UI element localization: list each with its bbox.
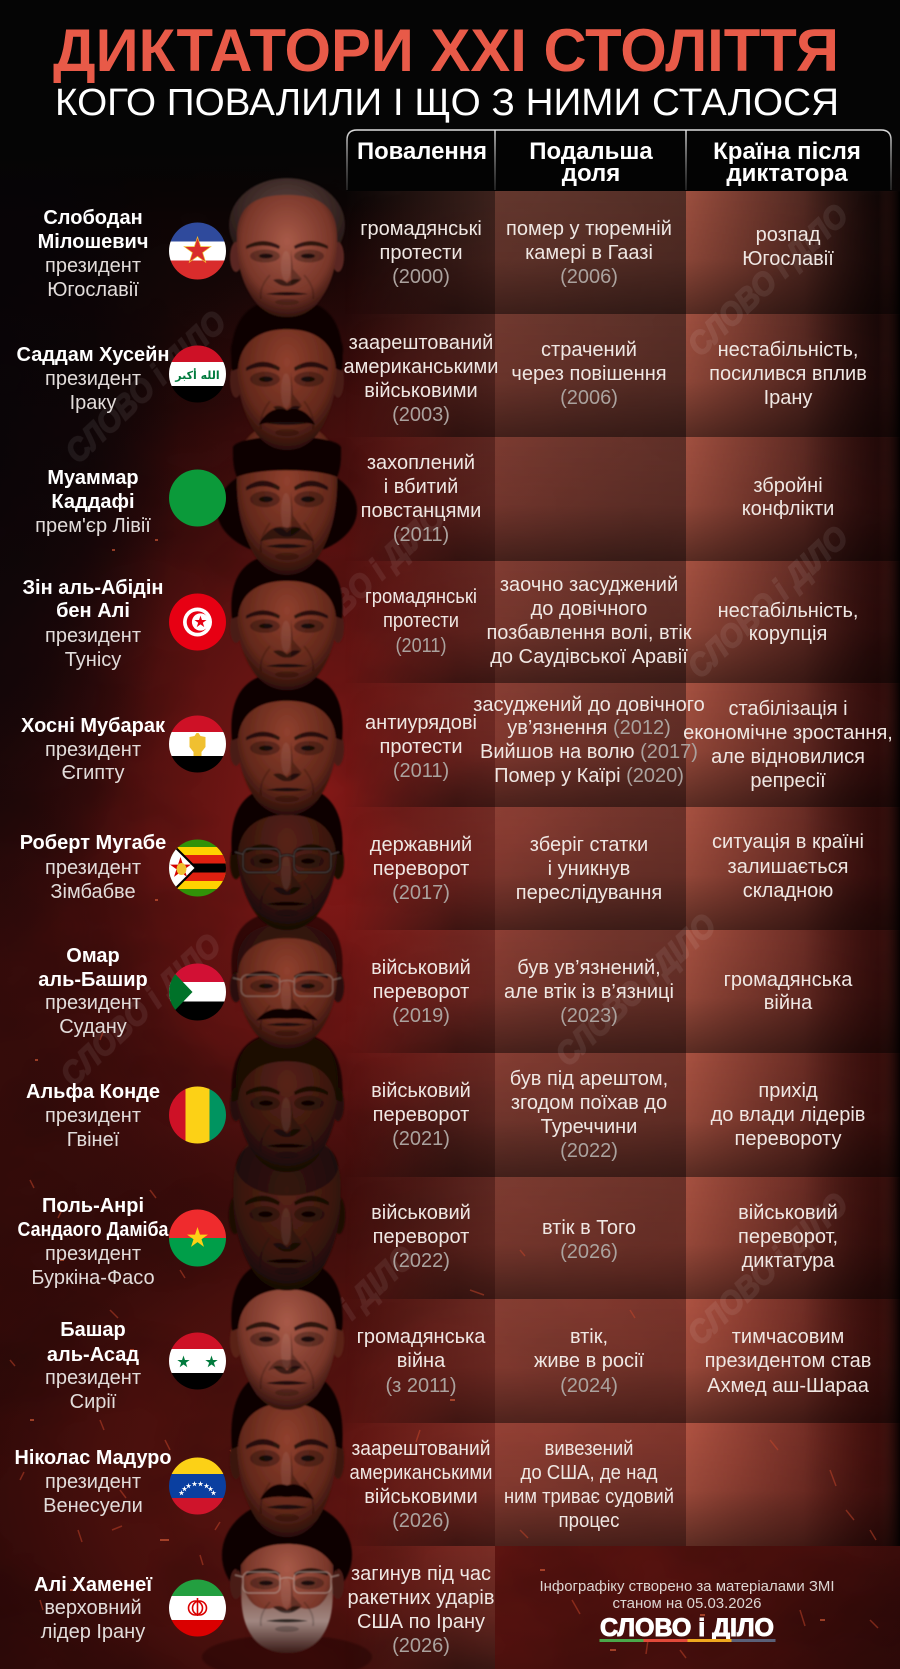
overthrow: американськими [344, 356, 498, 378]
fate: до США, де над [520, 1462, 658, 1484]
row 11: Maduro [14, 1438, 674, 1532]
subtitle: КОГО ПОВАЛИЛИ І ЩО З НИМИ СТАЛОСЯ [55, 82, 839, 124]
after: Ахмед аш-Шараа [707, 1375, 870, 1397]
fate [534, 1326, 644, 1397]
name: лідер Ірану [41, 1621, 145, 1643]
portraits (stacked) [202, 178, 372, 1669]
portrait: al-Bashir [230, 912, 344, 1048]
overthrow: заарештований [349, 332, 493, 354]
table header [347, 130, 891, 191]
fate: позбавлення волі, втік [486, 622, 692, 644]
watermarks: СЛОВО і ДІЛО [247, 1239, 422, 1405]
after [724, 969, 853, 1014]
after: диктатура [742, 1250, 835, 1272]
overthrow: громадянські [365, 586, 477, 608]
name: прем'єр Лівії [35, 515, 151, 537]
overthrow: загинув під час [351, 1563, 491, 1585]
overthrow: (2019) [392, 1005, 450, 1027]
fate: до Саудівської Аравії [490, 646, 688, 668]
after: репресії [750, 770, 826, 792]
overthrow: громадянська [357, 1326, 486, 1348]
name: Іраку [70, 392, 116, 414]
name: президент [45, 1243, 141, 1265]
name [18, 1195, 169, 1289]
header: further fate: доля [562, 160, 620, 187]
name: Слободан [43, 207, 143, 229]
fate: (2006) [560, 266, 618, 288]
name: верховний [44, 1597, 142, 1619]
footer note: станом на 05.03.2026 [612, 1595, 762, 1612]
name [14, 1447, 172, 1517]
row 4: Ben Ali [23, 574, 858, 671]
name: Сирії [70, 1391, 117, 1413]
header: country after: Країна після [713, 138, 861, 165]
name: Муаммар [47, 467, 139, 489]
name: президент [45, 255, 141, 277]
flag: Libya [169, 470, 226, 526]
portrait: Conde [230, 1032, 344, 1172]
table panels [345, 191, 900, 1669]
fate [506, 218, 672, 288]
name: Роберт Мугабе [20, 832, 166, 854]
name: Зін аль-Абідін [23, 577, 163, 599]
fate: Вийшов на волю (2017) [480, 741, 698, 763]
name [26, 1081, 160, 1151]
fate [516, 834, 662, 904]
overthrow: громадянські [360, 218, 482, 240]
after: залишається [728, 856, 848, 878]
after: Ірану [764, 387, 812, 409]
name: аль-Асад [47, 1344, 139, 1366]
portrait: Khamenei [202, 1500, 372, 1669]
overthrow: (2000) [392, 266, 450, 288]
name: Сандаого Даміба [18, 1219, 169, 1241]
after [705, 1326, 871, 1397]
overthrow: (2011) [396, 635, 446, 657]
name: Поль-Анрі [42, 1195, 144, 1217]
name: президент [45, 368, 141, 390]
fate: втік, [570, 1326, 608, 1348]
header: country after: диктатора [726, 160, 848, 187]
fate: Помер у Каїрі (2020) [494, 765, 684, 787]
watermarks: СЛОВО і ДІЛО [548, 907, 723, 1073]
after [718, 600, 858, 645]
fate: помер у тюремній [506, 218, 672, 240]
overthrow: США по Ірану [357, 1611, 485, 1633]
fate: вивезений [544, 1438, 634, 1460]
after: стабілізація і [728, 698, 848, 720]
flag: Iran [168, 1579, 226, 1637]
name: Хосні Мубарак [21, 715, 166, 737]
fate [504, 1438, 674, 1532]
flag: Venezuela [168, 1457, 226, 1515]
after: президентом став [705, 1350, 871, 1372]
name: президент [45, 739, 141, 761]
watermarks: СЛОВО і ДІЛО [680, 519, 855, 685]
header: overthrow: Повалення [357, 138, 487, 165]
fate: був ув’язнений, [517, 957, 661, 979]
overthrow [357, 1326, 486, 1397]
overthrow: протести [383, 610, 459, 632]
overthrow: державний [370, 834, 472, 856]
after: ситуація в країні [712, 831, 864, 853]
overthrow: протести [379, 736, 463, 758]
overthrow: (2022) [392, 1250, 450, 1272]
name: президент [45, 1105, 141, 1127]
embers [10, 540, 878, 1658]
flag: Sudan [168, 963, 226, 1022]
name [35, 467, 151, 537]
flag: Tunisia [169, 594, 226, 650]
after [709, 339, 867, 409]
fate: страчений [541, 339, 637, 361]
overthrow [350, 1438, 492, 1532]
after [712, 831, 864, 902]
overthrow [371, 1202, 471, 1272]
fate: до довічного [531, 598, 647, 620]
fate: і уникнув [548, 858, 630, 880]
portrait: Mubarak [230, 672, 344, 815]
overthrow: (2017) [392, 882, 450, 904]
fate: (2026) [560, 1241, 618, 1263]
name: Ніколас Мадуро [14, 1447, 172, 1469]
flag: Syria [168, 1332, 226, 1390]
overthrow [365, 712, 477, 782]
fate [542, 1217, 636, 1263]
overthrow: захоплений [367, 452, 475, 474]
portrait: Saddam [230, 299, 344, 450]
after [742, 475, 834, 520]
overthrow: переворот [373, 981, 469, 1003]
fate: (2023) [560, 1005, 618, 1027]
after [738, 1202, 838, 1272]
fate: процес [558, 1510, 620, 1532]
watermarks: СЛОВО і ДІЛО [53, 927, 228, 1093]
name: президент [45, 625, 141, 647]
name: Тунісу [65, 649, 121, 671]
name [38, 945, 148, 1038]
name: президент [45, 857, 141, 879]
row 8: Conde [26, 1068, 865, 1162]
fate: Туреччини [541, 1116, 637, 1138]
after: посилився вплив [709, 363, 867, 385]
after [742, 224, 834, 270]
name: Зімбабве [50, 881, 136, 903]
after: до влади лідерів [711, 1104, 865, 1126]
fate [473, 694, 705, 787]
fate [486, 574, 692, 668]
logo: Slovo i Dilo: СЛОВО і ДІЛО [600, 1614, 774, 1642]
portrait: Maduro [230, 1369, 344, 1537]
watermarks: СЛОВО і ДІЛО [277, 499, 452, 665]
row 7: al-Bashir [38, 945, 853, 1038]
fate: втік в Того [542, 1217, 636, 1239]
watermarks: СЛОВО і ДІЛО [58, 304, 233, 470]
row 12: Khamenei [34, 1563, 494, 1657]
fate: ним триває судовий [504, 1486, 674, 1508]
after: розпад [756, 224, 821, 246]
overthrow: повстанцями [361, 500, 481, 522]
overthrow: військовий [371, 957, 471, 979]
flag: Egypt [168, 715, 226, 773]
overthrow: протести [379, 242, 463, 264]
after [683, 698, 893, 792]
flag: Burkina Faso [168, 1209, 226, 1267]
overthrow: переворот [373, 858, 469, 880]
name: Судану [59, 1016, 127, 1038]
name [23, 577, 163, 671]
name: аль-Башир [38, 969, 148, 991]
name: Альфа Конде [26, 1081, 160, 1103]
row 9: Damiba [18, 1195, 838, 1289]
fate: живе в росії [534, 1350, 644, 1372]
name [21, 715, 166, 784]
overthrow: війна [397, 1350, 446, 1372]
overthrow [370, 834, 472, 904]
fate: але втік із в’язниці [504, 981, 674, 1003]
after [711, 1080, 865, 1150]
name: Саддам Хусейн [16, 344, 170, 366]
overthrow: ракетних ударів [348, 1587, 494, 1609]
overthrow [371, 957, 471, 1027]
overthrow: (2011) [393, 524, 449, 546]
overthrow: військовими [364, 380, 478, 402]
row 2: Saddam [16, 332, 867, 426]
overthrow [371, 1080, 471, 1150]
fate: (2024) [560, 1375, 618, 1397]
title: ДИКТАТОРИ XXI СТОЛІТТЯ [53, 17, 839, 84]
row 1: Milosevic [38, 207, 834, 301]
row 10: Assad [45, 1319, 871, 1413]
name [34, 1574, 152, 1643]
name [38, 207, 148, 301]
name [45, 1319, 141, 1413]
name: Каддафі [51, 491, 135, 513]
portrait: Assad [230, 1259, 344, 1410]
flag: Guinea [168, 1086, 226, 1144]
after: складною [743, 880, 833, 902]
header: further fate: Подальша [529, 138, 653, 165]
name: Єгипту [61, 762, 125, 784]
name: Венесуели [43, 1495, 143, 1517]
header frame [347, 130, 891, 190]
fate: згодом поїхав до [511, 1092, 667, 1114]
overthrow: переворот [373, 1104, 469, 1126]
overthrow [344, 332, 498, 426]
after: громадянська [724, 969, 853, 991]
after: переворот, [738, 1226, 838, 1248]
portrait: Damiba [229, 1133, 345, 1290]
name: Буркіна-Фасо [31, 1267, 155, 1289]
header: further fate [529, 138, 653, 187]
fate: камері в Гаазі [525, 242, 653, 264]
name: Гвінеї [67, 1129, 120, 1151]
overthrow: переворот [373, 1226, 469, 1248]
overthrow [360, 218, 482, 288]
name [16, 344, 170, 414]
after: Югославії [742, 248, 834, 270]
overthrow: (з 2011) [385, 1375, 457, 1397]
fate [510, 1068, 668, 1162]
overthrow: військовими [364, 1486, 478, 1508]
name [20, 832, 166, 903]
overthrow: (2026) [392, 1510, 450, 1532]
overthrow: і вбитий [384, 476, 458, 498]
header: country after [713, 138, 861, 187]
overthrow: антиурядові [365, 712, 477, 734]
portrait: Ben Ali [230, 554, 344, 690]
name: Мілошевич [38, 231, 148, 253]
after: перевороту [735, 1128, 841, 1150]
after: конфлікти [742, 498, 834, 520]
row 5: Mubarak [21, 694, 893, 792]
overthrow: (2011) [393, 760, 449, 782]
after: корупція [749, 623, 827, 645]
fate: засуджений до довічного [473, 694, 705, 716]
fate [504, 957, 674, 1027]
name: бен Алі [56, 600, 130, 622]
fate: (2022) [560, 1140, 618, 1162]
fate: був під арештом, [510, 1068, 668, 1090]
after: економічне зростання, [683, 722, 893, 744]
name: президент [45, 1367, 141, 1389]
overthrow: військовий [371, 1202, 471, 1224]
overthrow [361, 452, 481, 546]
after: прихід [758, 1080, 818, 1102]
fate: ув’язнення (2012) [507, 717, 671, 739]
name: Омар [66, 945, 120, 967]
flag: Iraq [168, 345, 226, 403]
overthrow [365, 586, 477, 657]
row 3: Gaddafi [35, 452, 834, 546]
footer note: Інфографіку створено за матеріалами ЗМІ [540, 1578, 834, 1595]
after: нестабільність, [718, 339, 858, 361]
watermarks: СЛОВО і ДІЛО [680, 197, 855, 363]
after: війна [764, 992, 813, 1014]
fate: зберіг статки [530, 834, 648, 856]
after: але відновилися [711, 746, 865, 768]
name: Башар [60, 1319, 126, 1341]
fate: заочно засуджений [500, 574, 678, 596]
overthrow: (2026) [392, 1635, 450, 1657]
overthrow: заарештований [352, 1438, 490, 1460]
portrait: Gaddafi [217, 424, 357, 575]
portrait: Mugabe [230, 785, 344, 930]
footer note [540, 1578, 834, 1612]
watermarks: СЛОВО і ДІЛО [680, 1186, 855, 1352]
overthrow: (2021) [392, 1128, 450, 1150]
watermarks [53, 197, 855, 1405]
overthrow: американськими [350, 1462, 492, 1484]
name: Югославії [47, 279, 139, 301]
name: Алі Хаменеї [34, 1574, 152, 1596]
flag: Zimbabwe [168, 839, 226, 897]
name: президент [45, 992, 141, 1014]
after: збройні [753, 475, 823, 497]
overthrow: (2003) [392, 404, 450, 426]
name: президент [45, 1471, 141, 1493]
fate: (2006) [560, 387, 618, 409]
row 6: Mugabe [20, 831, 864, 904]
flag: Iraq: الله أكبر [174, 368, 220, 382]
overthrow: військовий [371, 1080, 471, 1102]
after: військовий [738, 1202, 838, 1224]
flag: Yugoslavia [168, 222, 226, 280]
fate: через повішення [511, 363, 667, 385]
fate [511, 339, 667, 409]
after: нестабільність, [718, 600, 858, 622]
overthrow [348, 1563, 494, 1657]
after: тимчасовим [732, 1326, 844, 1348]
fate: переслідування [516, 882, 662, 904]
portrait: Milosevic [229, 178, 345, 317]
